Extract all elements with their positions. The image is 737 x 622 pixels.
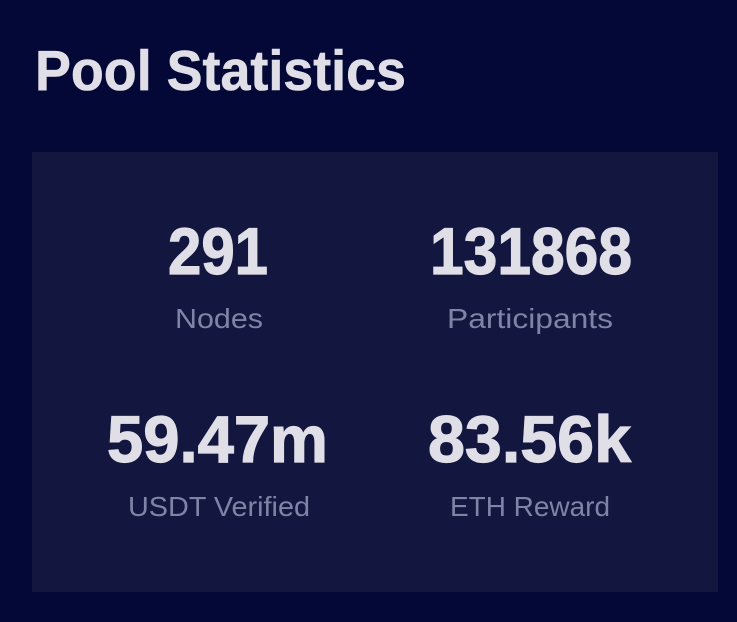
stat: USDT verified — [107, 402, 328, 522]
stat: ETH reward — [428, 402, 631, 522]
title: Pool Statistics — [35, 39, 406, 103]
label: USDT verified: USDT Verified — [128, 491, 310, 522]
stat: nodes — [168, 214, 268, 334]
value: USDT verified: 59.47m — [107, 402, 328, 476]
label: participants: Participants — [447, 303, 613, 334]
stat: participants — [430, 214, 632, 334]
panel background — [32, 152, 718, 592]
value: ETH reward: 83.56k — [428, 402, 631, 476]
value: nodes: 291 — [168, 214, 268, 288]
label: ETH reward: ETH Reward — [450, 491, 610, 522]
value: participants: 131868 — [430, 214, 632, 288]
panel: statistics — [32, 152, 718, 592]
label: nodes: Nodes — [175, 303, 263, 334]
